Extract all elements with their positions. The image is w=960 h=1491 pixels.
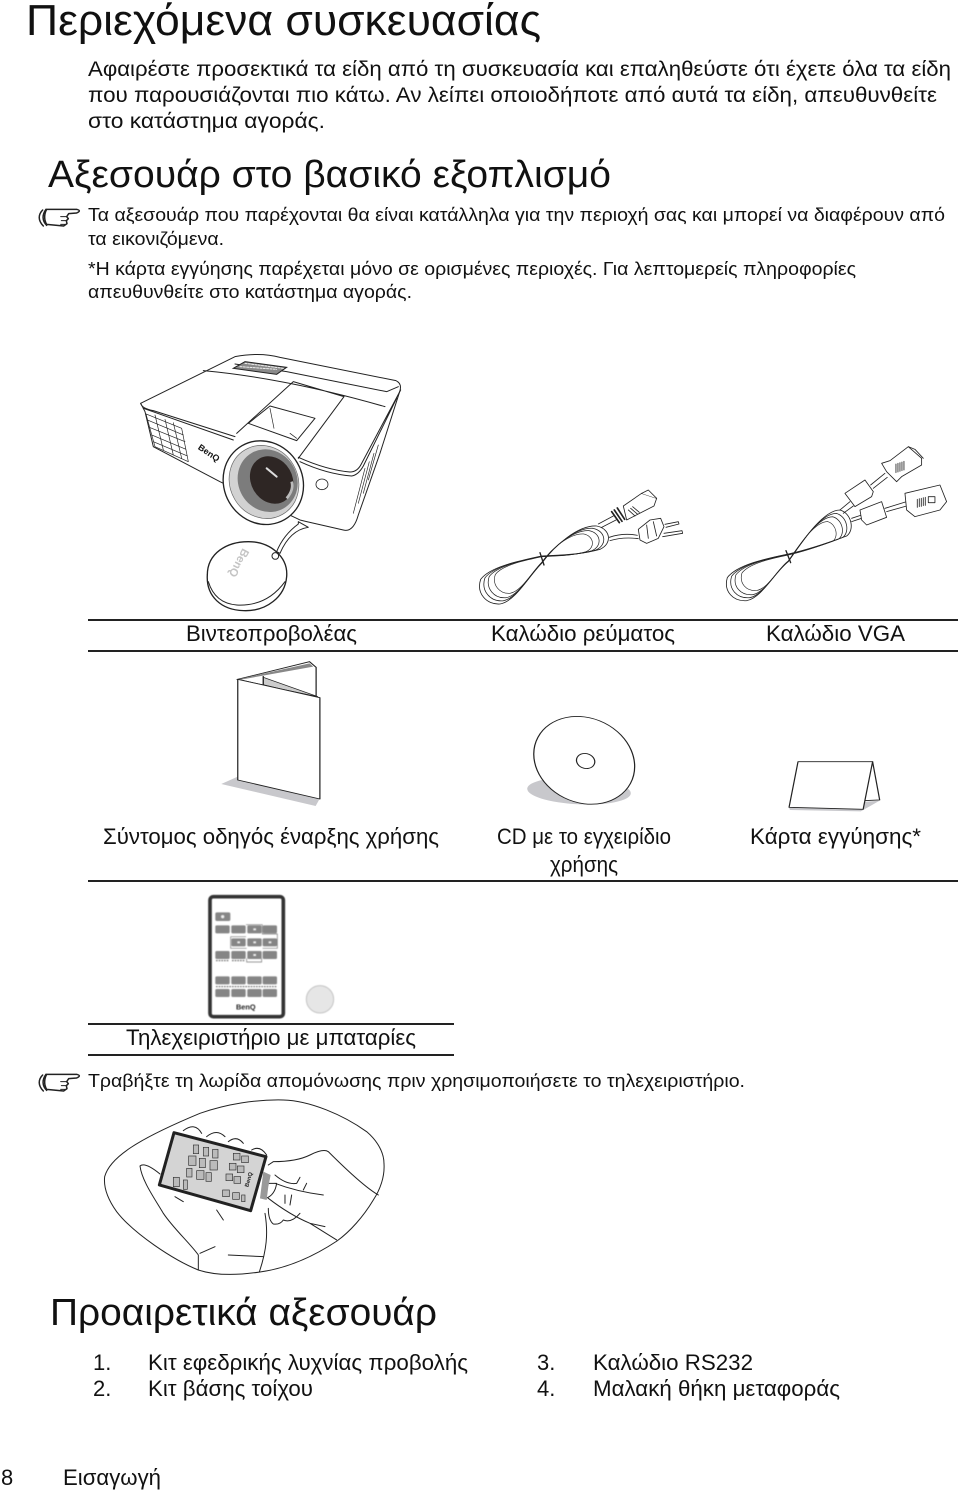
footer: page number and section: Εισαγωγή [63,1465,161,1490]
list: optional accessories: Μαλακή θήκη μεταφοράς [593,1376,840,1401]
list: optional accessories: Κιτ βάσης τοίχου [148,1376,313,1401]
labels row 1: Καλώδιο VGA [766,621,905,646]
lens [208,426,319,539]
illustration: projector with lens cap [141,354,401,611]
labels row 2: χρήσης [550,852,618,877]
label: remote: Τηλεχειριστήριο με μπαταρίες [126,1025,416,1050]
list: optional accessories: 1. [93,1350,111,1375]
icon: pointing hand note [39,209,79,226]
illustration: warranty card [789,762,880,811]
note: remove insulation tab: Τραβήξτε τη λωρίδα απομόνωσης πριν χρησιμοποιήσετε το τηλεχειριστήριο. [88,1071,745,1091]
note text block [88,205,945,302]
footer: page number and section [1,1465,161,1490]
illustration: VGA cable [726,447,947,601]
labels row 2 [103,824,921,877]
note text block: *Η κάρτα εγγύησης παρέχεται μόνο σε ορισμένες περιοχές. Για λεπτομερείς πληροφορίες [88,259,856,279]
labels row 2: Κάρτα εγγύησης* [750,824,921,849]
illustration: remote control [210,897,283,1017]
lens cap [207,542,287,611]
heading: standard accessories: Αξεσουάρ στο βασικό εξοπλισμό [48,154,611,196]
list: optional accessories: Καλώδιο RS232 [593,1350,753,1375]
illustration: remote control: BenQ [236,1002,256,1011]
list: optional accessories: 4. [537,1376,555,1401]
illustration: hands pulling tab from remote [104,1100,384,1274]
labels row 2: Σύντομος οδηγός έναρξης χρήσης [103,824,439,849]
cap strap [277,522,308,553]
icon: pointing hand note 2 [39,1074,79,1091]
brand on body: BenQ [196,442,222,464]
illustration: power cable [480,490,683,604]
list: optional accessories: Κιτ εφεδρικής λυχνίας προβολής [148,1350,468,1375]
illustration: projector with lens cap: BenQ [226,546,251,579]
list: optional accessories: 2. [93,1376,111,1401]
intro text block: που παρουσιάζονται πιο κάτω. Αν λείπει οποιοδήποτε από αυτά τα είδη, απευθυνθείτε [88,84,937,107]
labels row 2: CD με το εγχειρίδιο [497,824,671,849]
intro text block: στο κατάστημα αγοράς. [88,110,325,133]
list: optional accessories: 3. [537,1350,555,1375]
table rule lines [88,620,958,1055]
labels row 1 [186,621,905,646]
footer: page number and section: 8 [1,1465,13,1490]
note text block: απευθυνθείτε στο κατάστημα αγοράς. [88,282,412,302]
illustration: hands pulling tab from remote: BenQ [244,1171,255,1188]
heading: optional accessories: Προαιρετικά αξεσουάρ [50,1292,437,1334]
note text block: τα εικονιζόμενα. [88,229,224,249]
intro text block [88,58,951,133]
illustration: CD [519,707,650,813]
list: optional accessories [93,1350,840,1401]
illustration: battery [306,986,334,1013]
illustration: quick start guide [221,662,320,806]
vent grille [146,414,188,462]
labels row 1: Βιντεοπροβολέας [186,621,357,646]
note text block: Τα αξεσουάρ που παρέχονται θα είναι κατάλληλα για την περιοχή σας και μπορεί να διαφέρουν από [88,205,945,225]
intro text block: Αφαιρέστε προσεκτικά τα είδη από τη συσκευασία και επαληθεύστε ότι έχετε όλα τα είδη [88,58,951,81]
labels row 1: Καλώδιο ρεύματος [491,621,675,646]
